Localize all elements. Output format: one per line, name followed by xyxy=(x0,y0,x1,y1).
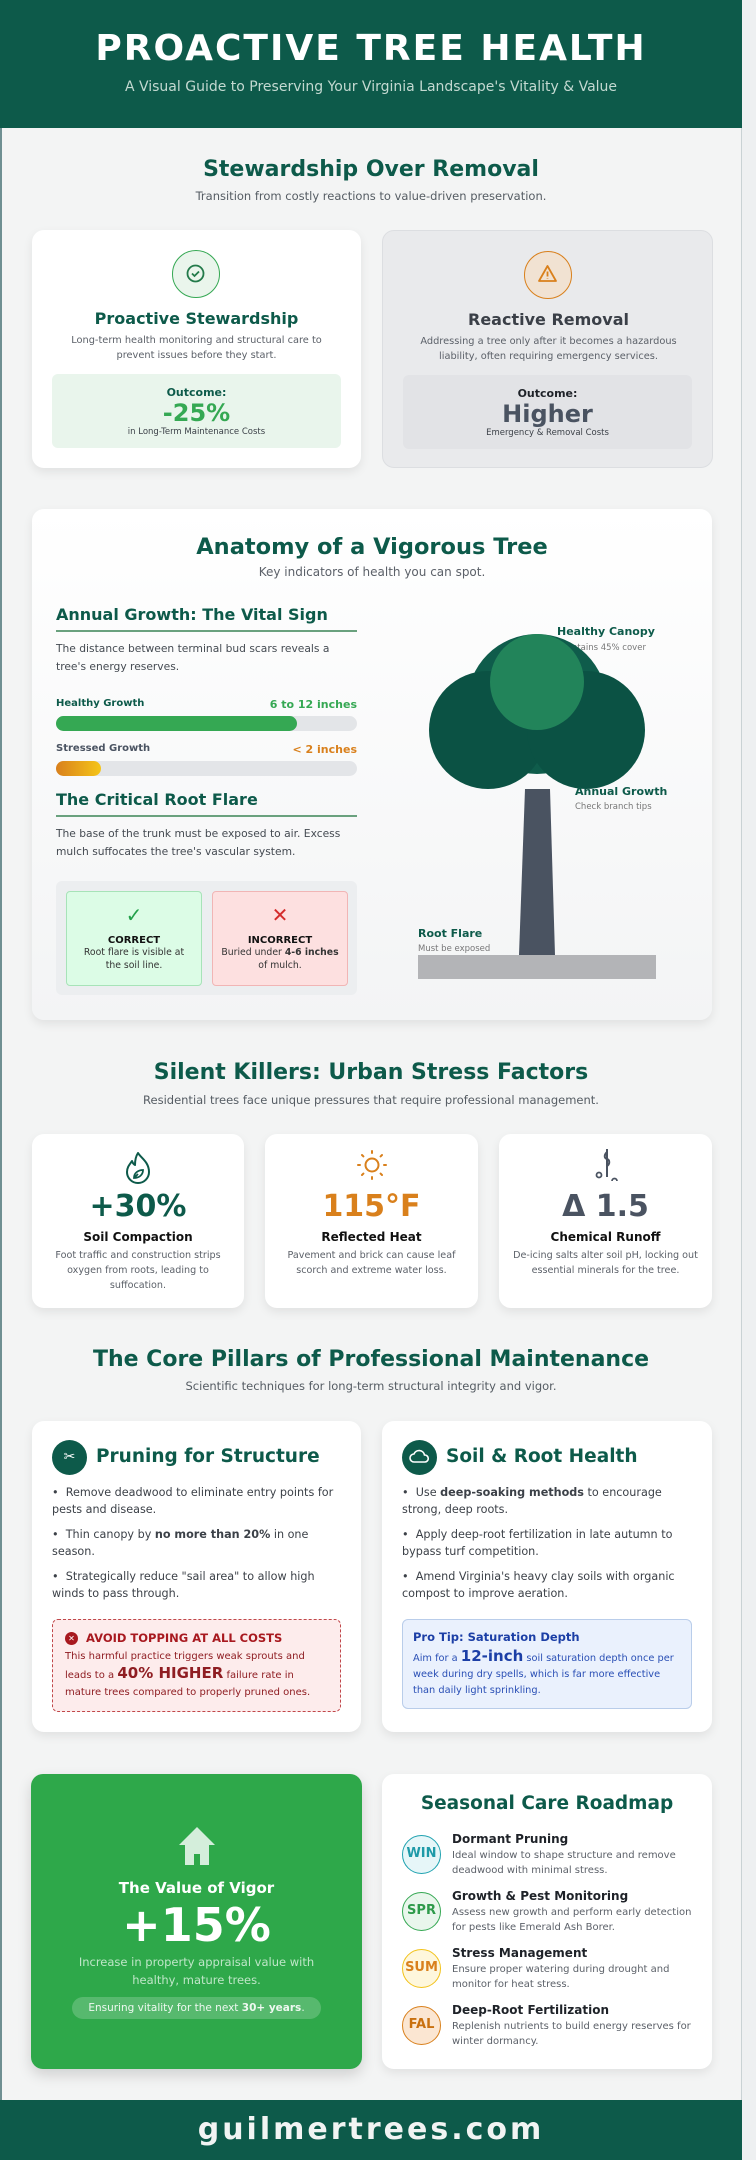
outcome box: -25% xyxy=(163,399,230,427)
subtitle: A Visual Guide to Preserving Your Virginia Landscape's Vitality & Value xyxy=(125,79,617,95)
pill: Ensuring vitality for the next 30+ years. xyxy=(88,2002,305,2014)
bullets xyxy=(402,1486,675,1600)
root flare block: The Critical Root Flare xyxy=(56,790,258,809)
icon: check xyxy=(172,250,220,298)
item: fall xyxy=(402,2003,691,2047)
callout: avoid topping: AVOID TOPPING AT ALL COSTS xyxy=(86,1631,282,1645)
root flare block: The base of the trunk must be exposed to air. Excess mulch suffocates the tree's vascular system. xyxy=(56,827,340,858)
heading: Pruning for Structure xyxy=(96,1446,320,1467)
item: spring: Assess new growth and perform early detection for pests like Emerald Ash Borer. xyxy=(452,1907,691,1933)
item: spring xyxy=(402,1889,691,1933)
bullets: • Apply deep-root fertilization in late autumn to bypass turf competition. xyxy=(402,1528,672,1558)
item: summer: SUM xyxy=(405,1960,438,1975)
panel: pruning xyxy=(32,1421,361,1732)
item: winter: WIN xyxy=(406,1846,437,1861)
subheading: Scientific techniques for long-term structural integrity and vigor. xyxy=(186,1379,556,1393)
bullets: • Thin canopy by no more than 20% in one season. xyxy=(52,1528,308,1558)
tree diagram xyxy=(418,625,667,979)
item: winter: Ideal window to shape structure and remove deadwood with minimal stress. xyxy=(452,1850,676,1876)
bullets: • Use deep-soaking methods to encourage strong, deep roots. xyxy=(402,1486,662,1516)
bar: healthy growth xyxy=(56,698,357,731)
callout: avoid topping: This harmful practice triggers weak sprouts and leads to a 40% HIGHER failure rate in mature trees compared to properly pruned ones. xyxy=(65,1651,310,1698)
heading: core pillars: The Core Pillars of Professional Maintenance xyxy=(93,1347,649,1372)
footer: guilmertrees.com xyxy=(198,2112,544,2147)
item: summer: Ensure proper watering during drought and monitor for heat stress. xyxy=(452,1964,669,1990)
item: fall: Deep-Root Fertilization xyxy=(452,2003,609,2017)
subheading: Residential trees face unique pressures that require professional management. xyxy=(143,1093,599,1107)
panel: reflected heat: Pavement and brick can cause leaf scorch and extreme water loss. xyxy=(288,1250,455,1276)
bar: stressed growth xyxy=(56,743,357,776)
panel: chemical runoff: Chemical Runoff xyxy=(551,1230,660,1244)
item: fall: Replenish nutrients to build energy reserves for winter dormancy. xyxy=(452,2021,691,2047)
correct xyxy=(66,891,202,986)
panel: value of vigor: +15% xyxy=(122,1898,271,1952)
card description: Long-term health monitoring and structural care to prevent issues before they start. xyxy=(71,335,322,361)
comparison box xyxy=(56,881,357,995)
footer xyxy=(0,2100,742,2160)
callout: pro tip: Aim for a 12-inch soil saturation depth once per week during dry spells, which is far more effective than daily light sprinkling. xyxy=(413,1647,674,1696)
outcome box: Outcome: xyxy=(167,386,226,399)
bar: stressed growth: Stressed Growth xyxy=(56,743,150,754)
incorrect xyxy=(212,891,348,986)
item: winter xyxy=(402,1832,676,1876)
tree diagram: Annual Growth xyxy=(575,785,667,798)
icon: warning xyxy=(524,251,572,299)
panel: seasonal roadmap xyxy=(382,1774,712,2069)
outcome box: Emergency & Removal Costs xyxy=(486,428,609,438)
icon: cloud xyxy=(402,1440,437,1475)
bullets: • Remove deadwood to eliminate entry points for pests and disease. xyxy=(52,1486,333,1516)
bullets xyxy=(52,1486,334,1600)
incorrect: Buried under 4-6 inches of mulch. xyxy=(221,947,339,970)
panel: soil compaction: Soil Compaction xyxy=(83,1230,193,1244)
panel: value of vigor: Increase in property appraisal value with healthy, mature trees. xyxy=(79,1955,314,1987)
bar: stressed growth: < 2 inches xyxy=(292,743,357,756)
heading: Soil & Root Health xyxy=(446,1446,638,1467)
panel: value of vigor: The Value of Vigor xyxy=(119,1879,274,1897)
callout: pro tip xyxy=(402,1619,692,1709)
panel: proactive stewardship xyxy=(32,230,361,468)
icon: flame leaf xyxy=(126,1152,150,1184)
icon: house xyxy=(179,1827,215,1865)
panel: reactive removal xyxy=(382,230,713,468)
card title: Proactive Stewardship xyxy=(95,309,298,328)
item: summer xyxy=(402,1946,669,1990)
outcome box: in Long-Term Maintenance Costs xyxy=(128,427,265,437)
bar: healthy growth: Healthy Growth xyxy=(56,698,144,709)
card description: Addressing a tree only after it becomes a hazardous liability, often requiring emergency services. xyxy=(420,336,677,362)
icon: pruning xyxy=(52,1440,87,1475)
root flare block xyxy=(56,790,357,986)
item: winter: Dormant Pruning xyxy=(452,1832,568,1846)
icon: droplets xyxy=(596,1149,618,1181)
header xyxy=(0,0,742,128)
annual growth block: Annual Growth: The Vital Sign xyxy=(56,605,328,624)
panel: chemical runoff xyxy=(499,1134,712,1308)
item: summer: Stress Management xyxy=(452,1946,587,1960)
correct: ✓ xyxy=(126,903,142,927)
panel: seasonal roadmap: Seasonal Care Roadmap xyxy=(421,1793,673,1814)
callout: pro tip: Pro Tip: Saturation Depth xyxy=(413,1630,580,1644)
outcome box xyxy=(52,374,341,448)
incorrect: INCORRECT xyxy=(248,935,312,946)
annual growth block xyxy=(56,605,357,776)
subheading: Key indicators of health you can spot. xyxy=(259,565,485,579)
item: spring: Growth & Pest Monitoring xyxy=(452,1889,628,1903)
panel: anatomy xyxy=(32,509,712,1020)
heading: silent killers: Silent Killers: Urban Stress Factors xyxy=(154,1060,588,1085)
panel: value of vigor xyxy=(31,1774,362,2069)
callout: avoid topping: ✕ xyxy=(68,1634,75,1643)
tree diagram: Root Flare xyxy=(418,927,482,940)
title: PROACTIVE TREE HEALTH xyxy=(95,28,647,69)
panel: soil compaction xyxy=(32,1134,244,1308)
correct: Root flare is visible at the soil line. xyxy=(84,947,184,970)
callout: avoid topping xyxy=(52,1619,341,1712)
tree diagram: Healthy Canopy xyxy=(557,625,655,638)
heading: Anatomy of a Vigorous Tree xyxy=(196,534,548,560)
panel: chemical runoff: Δ 1.5 xyxy=(562,1189,649,1224)
bullets: • Amend Virginia's heavy clay soils with organic compost to improve aeration. xyxy=(402,1570,675,1600)
outcome box: Outcome: xyxy=(518,387,577,400)
outcome box xyxy=(403,375,692,449)
bullets: • Strategically reduce "sail area" to allow high winds to pass through. xyxy=(52,1570,315,1600)
correct: CORRECT xyxy=(108,935,160,946)
icon: pruning: ✂ xyxy=(64,1449,75,1465)
tree diagram: Check branch tips xyxy=(575,802,652,812)
pill xyxy=(72,1997,321,2019)
outcome box: Higher xyxy=(502,400,593,428)
item: fall: FAL xyxy=(409,2017,434,2032)
item: spring: SPR xyxy=(407,1903,436,1918)
panel: soil & root xyxy=(382,1421,712,1732)
panel: reflected heat: 115°F xyxy=(322,1189,421,1224)
panel: soil compaction: Foot traffic and construction strips oxygen from roots, leading to suffocation. xyxy=(55,1250,221,1291)
icon: sun xyxy=(357,1150,387,1180)
tree diagram: Maintains 45% cover xyxy=(557,643,646,653)
subheading: Transition from costly reactions to value-driven preservation. xyxy=(196,189,546,203)
bar: healthy growth: 6 to 12 inches xyxy=(270,698,357,711)
panel: reflected heat: Reflected Heat xyxy=(321,1230,422,1244)
tree diagram: Must be exposed xyxy=(418,944,490,954)
panel: reflected heat xyxy=(265,1134,478,1308)
heading: stewardship: Stewardship Over Removal xyxy=(203,157,539,182)
panel: soil compaction: +30% xyxy=(90,1189,186,1224)
panel: chemical runoff: De-icing salts alter soil pH, locking out essential minerals for the tree. xyxy=(513,1250,698,1276)
card title: Reactive Removal xyxy=(468,310,629,329)
annual growth block: The distance between terminal bud scars reveals a tree's energy reserves. xyxy=(56,642,329,673)
incorrect: ✕ xyxy=(272,903,288,927)
